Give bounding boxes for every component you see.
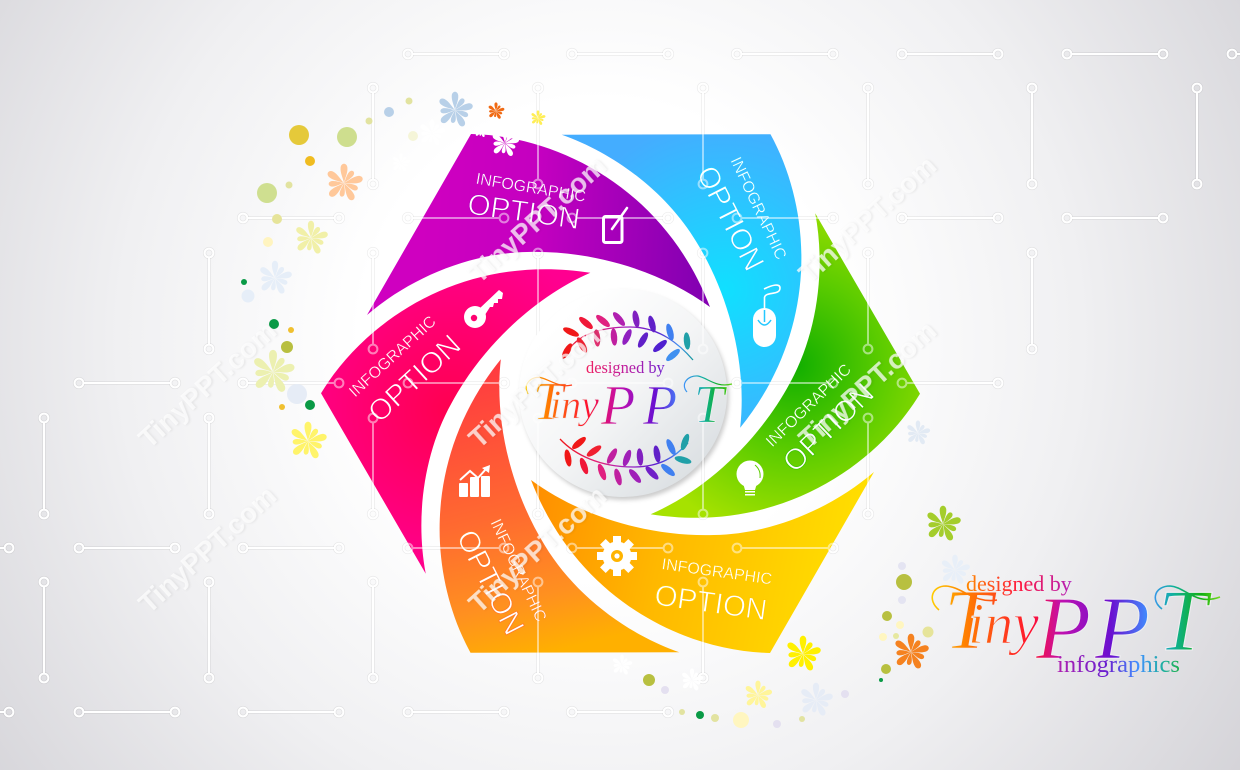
blade labels and icons [346, 155, 881, 640]
blue label: INFOGRAPHIC [727, 155, 789, 262]
yellow label [653, 556, 773, 627]
hexagon blades [269, 44, 972, 743]
watermark text: TinyPPT.com [792, 150, 942, 289]
brand: designed by: designed by [966, 571, 1072, 596]
brand: Tiny PPT: P [1035, 579, 1091, 678]
icon: lightbulb [736, 460, 764, 496]
icon: rising bar chart [459, 465, 490, 497]
logo: Tiny PPT: P [642, 375, 677, 437]
logo: Tiny PPT: T [533, 371, 567, 431]
brand: Tiny PPT: iny [968, 591, 1039, 656]
brand: infographics: infographics [1057, 651, 1180, 678]
scattered flowers and dots: upper left [241, 92, 546, 460]
orange label: INFOGRAPHIC [487, 517, 549, 624]
logo: T swashes [526, 376, 732, 394]
watermark text: TinyPPT.com [462, 315, 612, 454]
logo: Tiny PPT: iny [550, 382, 599, 427]
icon: mouse [753, 285, 780, 347]
icon: edit pencil [604, 208, 627, 242]
logo: designed by: designed by [586, 358, 666, 377]
yellow label: OPTION [653, 579, 769, 627]
green label: OPTION [777, 377, 881, 479]
watermark text: TinyPPT.com [132, 315, 282, 454]
brand: T swashes [932, 586, 1220, 610]
white flowers over purple blade [475, 124, 520, 157]
watermark text [132, 150, 942, 619]
blade: blue [562, 44, 890, 432]
brand logo lower right [932, 571, 1220, 678]
blue label: OPTION [690, 161, 770, 276]
logo: Tiny PPT: P [600, 375, 635, 437]
laurel: bottom [560, 433, 692, 486]
purple label: INFOGRAPHIC [475, 171, 587, 206]
brand: Tiny PPT: T [1158, 573, 1213, 670]
laurel: top [560, 310, 693, 363]
purple label: OPTION [466, 188, 582, 236]
pink label: INFOGRAPHIC [346, 313, 440, 401]
brand: Tiny PPT: T [944, 571, 997, 667]
grid overlay on the hexagon [327, 134, 914, 653]
blade: green [644, 213, 972, 601]
logo: Tiny PPT: T [694, 374, 728, 434]
blade: orange [351, 355, 679, 743]
watermark text: TinyPPT.com [792, 315, 942, 454]
centre disc [519, 289, 727, 497]
watermark text: TinyPPT.com [462, 150, 612, 289]
orange label: OPTION [450, 525, 530, 640]
centre logo [526, 310, 732, 486]
pink label: OPTION [362, 328, 468, 429]
icon: gear [597, 536, 637, 576]
blade: purple [367, 134, 710, 315]
watermark text: TinyPPT.com [132, 480, 282, 619]
brand: Tiny PPT: P [1094, 579, 1150, 678]
icon: key [464, 290, 503, 328]
green label: INFOGRAPHIC [763, 361, 855, 451]
yellow label: INFOGRAPHIC [661, 556, 773, 588]
blade: pink [269, 186, 597, 574]
scattered flowers and dots: lower right [612, 421, 971, 728]
watermark text: TinyPPT.com [462, 480, 612, 619]
blade: yellow [531, 472, 874, 653]
